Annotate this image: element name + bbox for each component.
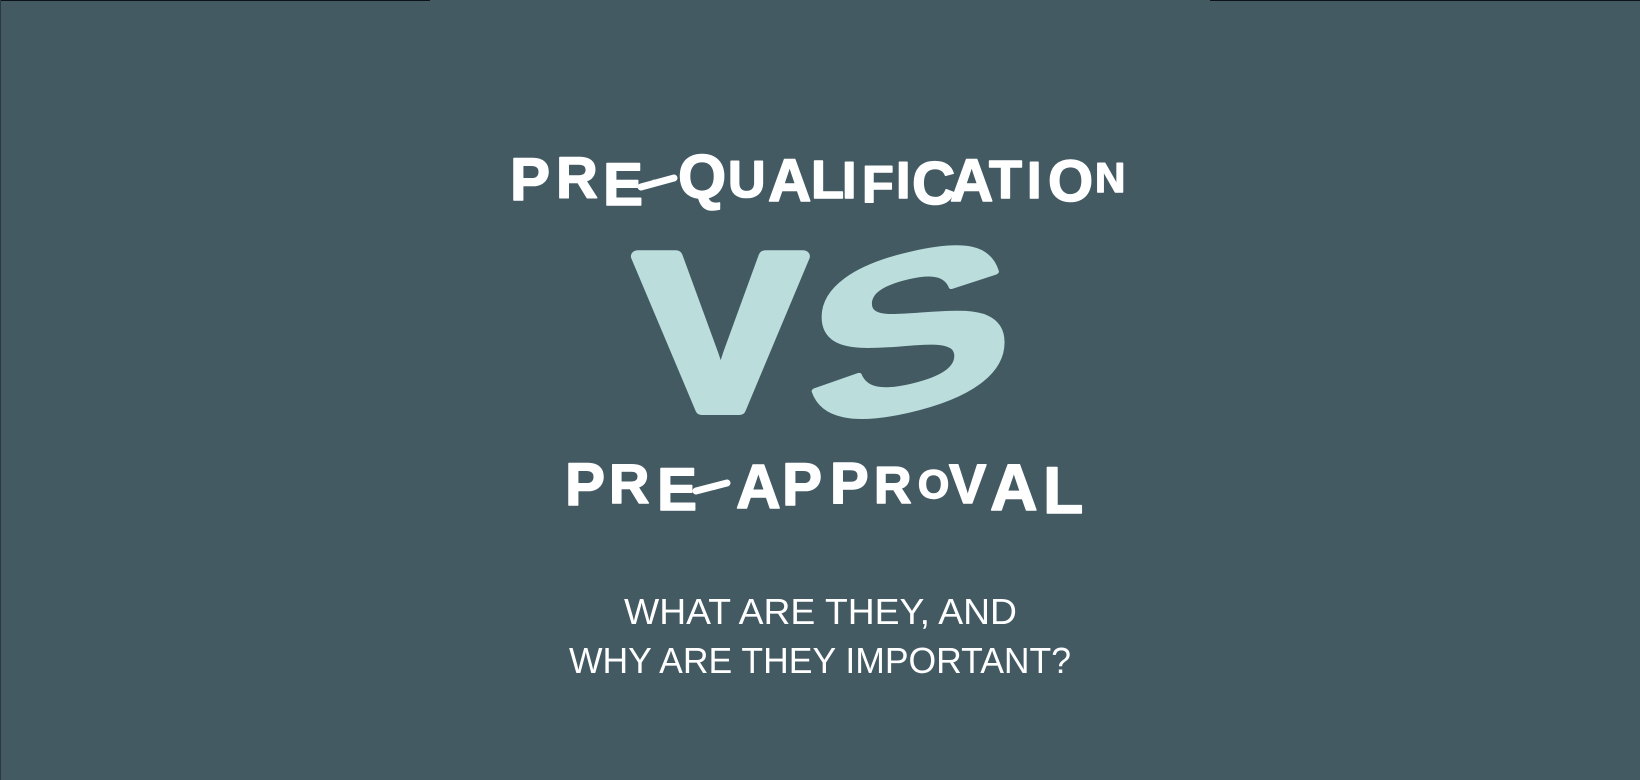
heading: Pre-Approval: O — [918, 463, 949, 507]
heading: Pre-Qualification: Q — [678, 143, 726, 212]
heading: Pre-Qualification: F — [862, 156, 894, 214]
heading: Pre-Approval: P — [830, 451, 869, 516]
heading: Pre-Qualification: P — [510, 146, 550, 213]
heading: Pre-Approval: P — [782, 451, 822, 518]
heading: Pre-Qualification: O — [1048, 149, 1093, 214]
subtitle: WHY ARE THEY IMPORTANT? — [569, 640, 1071, 681]
heading: Pre-Qualification — [510, 143, 1125, 218]
heading: Pre-Qualification: I — [842, 152, 856, 210]
heading: Pre-Qualification: - — [652, 164, 662, 197]
heading: Pre-Qualification: A — [768, 147, 811, 214]
heading: Pre-Approval: - — [706, 469, 716, 502]
VS emblem: S — [806, 186, 1013, 479]
heading: Pre-Approval: L — [1043, 453, 1083, 527]
heading: Pre-Qualification: L — [811, 150, 844, 210]
heading: Pre-Qualification: U — [728, 151, 766, 209]
subtitle — [569, 591, 1071, 681]
heading: Pre-Approval: A — [736, 453, 781, 522]
heading: Pre-Approval: P — [565, 451, 605, 518]
heading: Pre-Approval: R — [609, 452, 649, 515]
heading: Pre-Qualification: C — [912, 150, 955, 217]
heading: Pre-Qualification: I — [896, 152, 910, 210]
heading: Pre-Approval — [565, 450, 1083, 527]
heading: Pre-Qualification: I — [1027, 152, 1041, 210]
heading: Pre-Approval: A — [990, 450, 1038, 524]
VS emblem — [636, 186, 1013, 479]
heading: Pre-Qualification: E — [603, 151, 643, 218]
heading: Pre-Qualification: A — [950, 147, 993, 214]
subtitle: WHAT ARE THEY, AND — [624, 591, 1017, 632]
heading: Pre-Qualification: T — [989, 150, 1022, 210]
heading: Pre-Approval: R — [874, 457, 912, 515]
heading: Pre-Approval: V — [949, 452, 986, 515]
heading: Pre-Qualification: R — [556, 146, 598, 211]
heading: Pre-Qualification: N — [1095, 154, 1125, 201]
heading: Pre-Approval: E — [657, 456, 697, 523]
VS emblem: V — [636, 209, 805, 457]
